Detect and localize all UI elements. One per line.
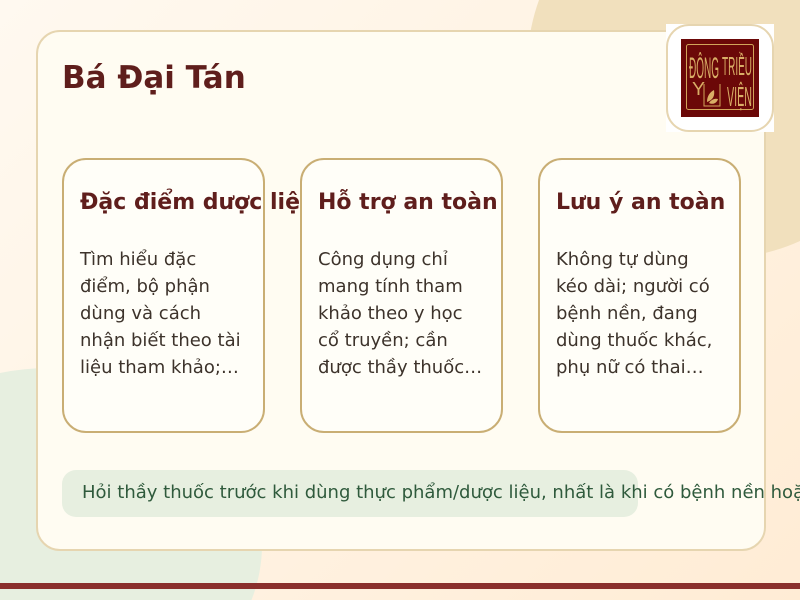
text block: đặc điểm: Tìm hiểu đặc	[80, 249, 196, 270]
panel: hỗ trợ an toàn	[300, 158, 503, 433]
logo: Đông Triều Y Viện	[666, 24, 774, 132]
text block: lưu ý: phụ nữ có thai…	[556, 357, 704, 378]
text block: hỗ trợ: cổ truyền; cần	[318, 330, 448, 351]
text block: đặc điểm: điểm, bộ phận	[80, 276, 210, 297]
text block: hỗ trợ: khảo theo y học	[318, 303, 463, 324]
text block: đặc điểm: dùng và cách	[80, 303, 201, 324]
text block: lưu ý: kéo dài; người có	[556, 276, 710, 297]
text block: đặc điểm	[80, 249, 241, 378]
heading: đặc điểm dược liệu: Đặc điểm dược liệu	[80, 190, 316, 215]
heading: hỗ trợ an toàn: Hỗ trợ an toàn	[318, 190, 498, 215]
panel: main card	[36, 30, 766, 551]
text block: lưu ý: bệnh nền, đang	[556, 303, 698, 324]
logo: Đông Triều Y Viện: Y	[692, 79, 705, 99]
title: Bá Đại Tán	[62, 60, 246, 96]
text block: lưu ý: Không tự dùng	[556, 249, 689, 270]
heading: lưu ý an toàn: Lưu ý an toàn	[556, 190, 725, 215]
panel: đặc điểm dược liệu	[62, 158, 265, 433]
bottom bar	[0, 583, 800, 589]
text block: đặc điểm: liệu tham khảo;…	[80, 357, 239, 378]
text block: hỗ trợ: Công dụng chỉ	[318, 249, 448, 270]
text block: lưu ý: dùng thuốc khác,	[556, 330, 712, 351]
text block: hỗ trợ: mang tính tham	[318, 276, 463, 297]
text block: hỗ trợ	[318, 249, 482, 378]
callout: advice note	[62, 470, 638, 517]
text block: lưu ý	[556, 249, 712, 378]
text block: hỗ trợ: được thầy thuốc…	[318, 357, 482, 378]
panel: lưu ý an toàn	[538, 158, 741, 433]
text block: đặc điểm: nhận biết theo tài	[80, 330, 241, 351]
